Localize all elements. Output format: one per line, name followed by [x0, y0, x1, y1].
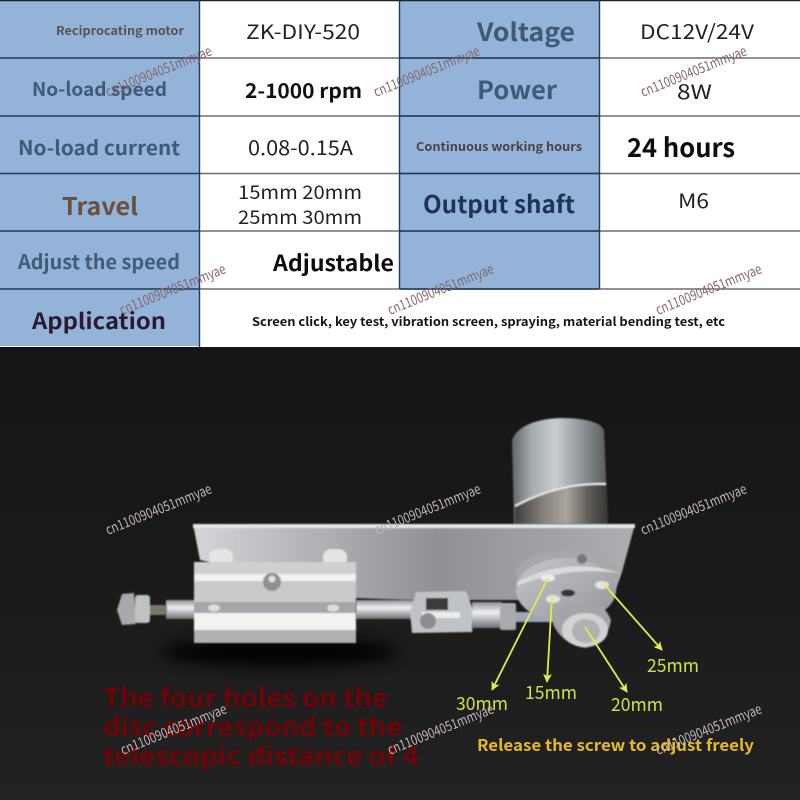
label: output shaft: Output shaft [423, 185, 575, 220]
watermarks: cn1100904051mmyae [637, 41, 750, 102]
label: continuous working hours: Continuous working hours [416, 138, 582, 155]
value: travel distances [238, 178, 362, 230]
label: 25mm: 25mm [647, 652, 699, 678]
label: travel: Travel [62, 187, 138, 222]
icon: mounting plate [193, 524, 635, 600]
icon: motor body [512, 418, 608, 524]
icon: rod end bearing and bolt [553, 603, 611, 648]
label: voltage: Voltage [476, 13, 575, 49]
label: application: Application [31, 304, 166, 336]
value: current: 0.08-0.15A [248, 132, 354, 161]
watermarks: cn1100904051mmyae [117, 699, 230, 760]
label: reciprocating motor: Reciprocating motor [56, 22, 185, 39]
icon: actuator rod and nuts [117, 593, 422, 625]
watermarks: cn1100904051mmyae [652, 699, 765, 760]
arrow: 30mm hole [492, 578, 548, 690]
icon: threaded link rod [472, 602, 554, 630]
arrow: 15mm hole [547, 597, 552, 682]
block shadow [160, 638, 400, 666]
caption: four holes note: telescopic distance of 4 [103, 737, 419, 773]
watermarks: cn1100904051mmyae [384, 699, 497, 760]
watermarks: cn1100904051mmyae [637, 479, 750, 540]
value: application list: Screen click, key test, vibration screen, spraying, material bending test, etc [252, 313, 725, 330]
watermarks: cn1100904051mmyae [371, 479, 484, 540]
watermarks: cn1100904051mmyae [102, 41, 215, 102]
watermarks [102, 41, 765, 760]
caption: four holes note: disc correspond to the [103, 708, 402, 744]
panel: specification table [0, 0, 800, 347]
panel: product photo [0, 347, 800, 800]
label: power: Power [477, 71, 557, 107]
value: adjustable: Adjustable [272, 246, 394, 278]
caption: release the screw: Release the screw to adjust freely [477, 732, 754, 756]
watermarks: cn1100904051mmyae [370, 41, 483, 102]
watermarks: cn1100904051mmyae [102, 479, 215, 540]
label: 20mm: 20mm [611, 691, 663, 717]
watermarks: cn1100904051mmyae [384, 259, 497, 320]
value: speed: 2-1000 rpm [245, 75, 362, 104]
label: no-load speed: No-load speed [32, 75, 167, 102]
icon: clevis joint [410, 591, 474, 633]
arrow: 20mm hole [585, 627, 627, 692]
label: no-load current: No-load current [18, 132, 181, 161]
value: power: 8W [677, 76, 713, 105]
table label cells [0, 0, 599, 346]
value: working hours: 24 hours [627, 128, 735, 165]
label: 30mm: 30mm [456, 690, 508, 716]
watermarks: cn1100904051mmyae [116, 259, 229, 320]
icon: aluminium slide block [194, 562, 356, 643]
value: model: ZK-DIY-520 [246, 16, 360, 45]
value: travel distances: 25mm 30mm [238, 203, 362, 230]
label: 15mm: 15mm [525, 679, 577, 705]
caption: four holes note [103, 679, 419, 773]
value: travel distances: 15mm 20mm [238, 178, 362, 205]
arrow: 25mm hole [603, 583, 662, 650]
icon: standoffs [209, 549, 347, 567]
icon: crank disc with holes [516, 550, 620, 622]
value: output shaft: M6 [678, 185, 709, 214]
caption: four holes note: The four holes on the [103, 679, 388, 715]
watermarks: cn1100904051mmyae [652, 259, 765, 320]
value: voltage: DC12V/24V [640, 16, 755, 45]
label: adjust the speed: Adjust the speed [17, 246, 180, 275]
